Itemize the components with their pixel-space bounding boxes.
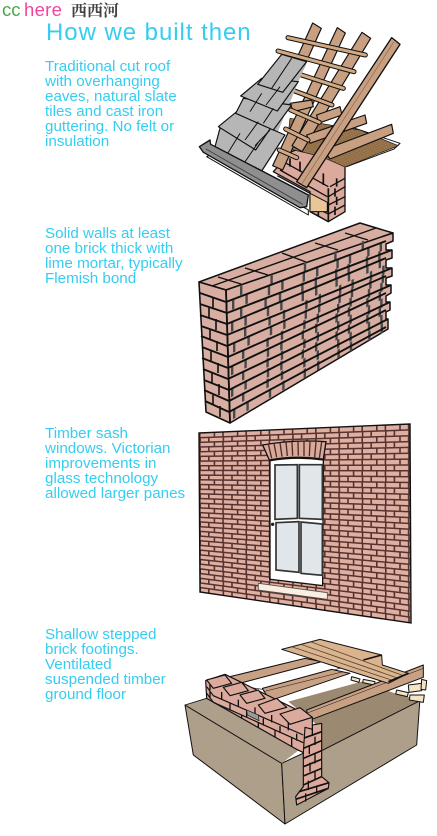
text: windows: windows. Victorian — [45, 440, 170, 457]
window wall: brick face — [199, 424, 411, 623]
text: foundations: Shallow stepped — [45, 626, 156, 643]
roof: soffit board — [207, 155, 308, 215]
window: upper right pane — [299, 465, 322, 519]
wall: front face with toothed end — [226, 233, 393, 423]
window: frame — [270, 458, 323, 586]
footing: brick wall course band — [206, 674, 312, 753]
wall: top face — [199, 223, 393, 290]
footing: joists — [230, 658, 423, 721]
window: sash catch — [271, 523, 274, 526]
text: roof: insulation — [45, 133, 109, 150]
roof: white eaves strip — [347, 127, 400, 167]
window: upper left pane — [275, 465, 297, 519]
footing: ground top surface — [185, 698, 299, 763]
footing: top course bricks — [207, 675, 312, 724]
roof: front rafter — [297, 38, 400, 188]
text: foundations: ground floor — [45, 686, 126, 703]
illustration: footing and timber floor — [185, 639, 427, 824]
text: roof: eaves, natural slate — [45, 88, 177, 105]
text: walls: Solid walls at least — [45, 225, 170, 242]
illustration: brick wall — [199, 223, 393, 423]
footing: ground right face — [282, 698, 420, 824]
text: walls: lime mortar, typically — [45, 255, 183, 272]
roof: soffit box — [310, 193, 327, 212]
text: walls — [45, 225, 183, 287]
window: brick arch lintel — [263, 441, 326, 460]
text: walls: one brick thick with — [45, 240, 173, 257]
wall: vertical joints — [226, 237, 386, 418]
window: stone sill — [258, 583, 327, 599]
window wall: joints, second bond — [199, 433, 411, 620]
footing: air vent — [247, 710, 259, 721]
footing: dark subfloor — [288, 682, 420, 751]
footing: vertical brick wall section — [296, 723, 329, 805]
footing: sleeper wall bricks — [351, 677, 427, 702]
roof: rear rafters — [253, 23, 371, 170]
footing: floorboards — [282, 639, 408, 683]
text: roof: Traditional cut roof — [45, 58, 170, 75]
text: roof: tiles and cast iron — [45, 103, 163, 120]
site logo — [2, 0, 119, 21]
text: windows: Timber sash — [45, 425, 128, 442]
text: foundations: brick footings. — [45, 641, 139, 658]
window: lower right pane — [301, 522, 322, 575]
footing: white gap — [233, 662, 340, 689]
roof: ceiling joists — [290, 100, 393, 159]
text: walls: Flemish bond — [45, 270, 136, 287]
text: foundations: suspended timber — [45, 671, 166, 688]
wall: course lines — [226, 241, 392, 412]
text: foundations — [45, 626, 166, 703]
roof: brick wall head — [273, 147, 345, 222]
text: roof: guttering. No felt or — [45, 118, 174, 135]
roof: slate tiles — [215, 54, 307, 171]
text: windows: glass technology — [45, 470, 158, 487]
roof: battens — [278, 38, 365, 158]
roof: iron gutter — [199, 140, 308, 208]
sash window — [258, 441, 327, 599]
text: windows: improvements in — [45, 455, 156, 472]
illustration: roof — [199, 23, 400, 222]
window: lower left pane — [276, 522, 299, 572]
text: windows — [45, 425, 185, 502]
title: How we built then — [46, 19, 252, 46]
window wall: course lines — [199, 430, 410, 617]
window wall: outline — [199, 424, 411, 623]
text: roof: with overhanging — [45, 73, 160, 90]
footing: ground left face — [185, 705, 285, 824]
roof: ceiling decking — [287, 118, 398, 167]
text: foundations: Ventilated — [45, 656, 112, 673]
wall: end face — [199, 282, 230, 423]
window wall: joints, first bond — [199, 427, 411, 614]
text: roof — [45, 58, 177, 150]
illustrations — [184, 22, 428, 824]
text: windows: allowed larger panes — [45, 485, 185, 502]
illustration: brick wall with sash window — [199, 424, 411, 623]
